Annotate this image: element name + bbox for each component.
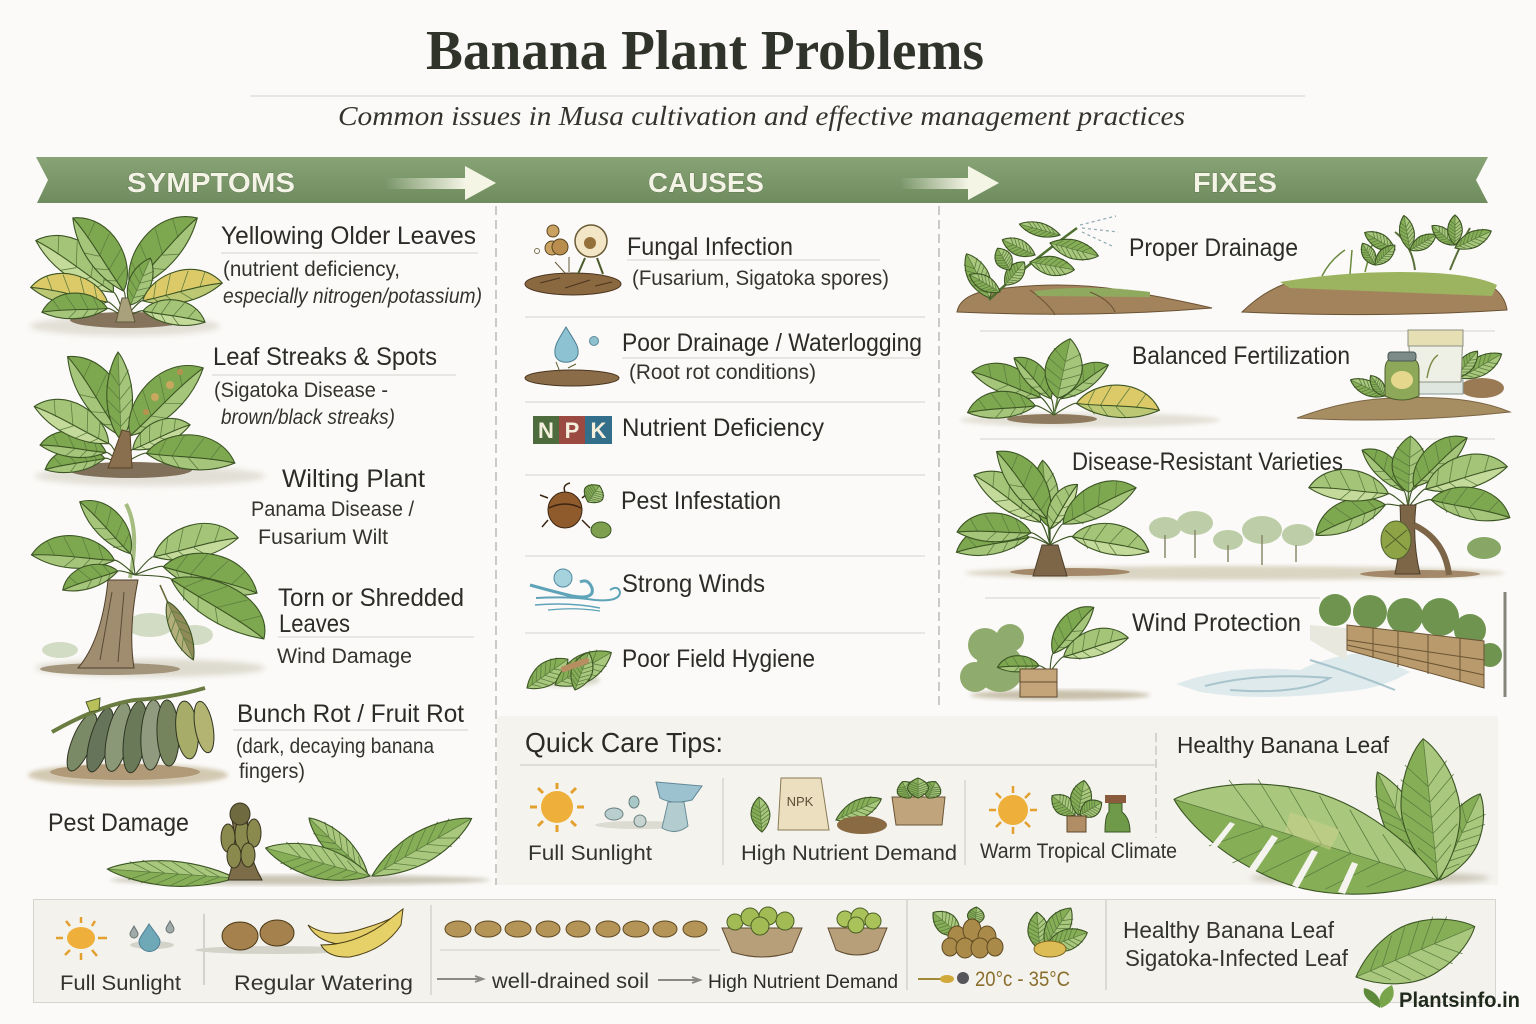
illustration: healthy banana leaves bbox=[1160, 736, 1497, 926]
brand mark bbox=[1364, 985, 1520, 1012]
brand mark: Plantsinfo.in bbox=[1399, 989, 1520, 1012]
illustration: yellowing plant bbox=[30, 212, 223, 355]
label: bunch rot / fruit rot bbox=[233, 700, 468, 783]
icon: fungal infection bbox=[525, 225, 621, 295]
label: healthy banana leaf: Healthy Banana Leaf bbox=[1123, 917, 1335, 943]
header: symptoms: SYMPTOMS bbox=[127, 167, 295, 198]
illustration: proper drainage bbox=[957, 214, 1507, 315]
icon: sun and sprayer bbox=[530, 782, 702, 832]
icon: NPK blocks: P bbox=[565, 418, 579, 443]
panel: quick care tips bbox=[497, 716, 1498, 926]
label: fungal infection bbox=[627, 233, 889, 290]
label: yellowing older leaves: Yellowing Older Leaves bbox=[221, 222, 476, 250]
arrow: to well-drained soil bbox=[437, 976, 483, 982]
label: temperature range: 20°c - 35°C bbox=[975, 968, 1070, 991]
label: nutrient deficiency: Nutrient Deficiency bbox=[622, 414, 824, 442]
illustration: disease-resistant varieties bbox=[956, 430, 1510, 591]
panel: symptoms bbox=[28, 212, 490, 891]
icon: water drop bbox=[525, 327, 619, 386]
illustration: rotten banana bunch bbox=[28, 688, 228, 786]
label: wilting plant: Panama Disease / bbox=[251, 498, 414, 521]
panel: causes bbox=[520, 225, 925, 697]
icon: NPK blocks bbox=[533, 416, 612, 444]
label: leaf streaks and spots: Leaf Streaks & Spots bbox=[213, 343, 437, 371]
label: bunch rot / fruit rot: (dark, decaying banana bbox=[236, 735, 434, 758]
icon: seed row and baskets bbox=[440, 907, 887, 957]
label: well-drained soil: well-drained soil bbox=[491, 970, 649, 993]
arrow: causes to fixes bbox=[900, 166, 999, 200]
icon: field debris bbox=[520, 641, 618, 697]
icon: NPK blocks: K bbox=[591, 418, 607, 443]
label: bunch rot / fruit rot: Bunch Rot / Fruit Rot bbox=[237, 700, 464, 728]
icon: pest bbox=[540, 480, 611, 538]
label: wilting plant bbox=[251, 465, 425, 549]
label: torn or shredded leaves: Wind Damage bbox=[277, 645, 412, 668]
subtitle: Common issues in Musa cultivation and effective management practices bbox=[338, 101, 1185, 131]
illustration: wind protection bbox=[960, 592, 1505, 700]
banner: column headers bbox=[36, 157, 1488, 203]
illustration: banana leaf bbox=[1345, 901, 1486, 1003]
illustration: wilting plant bbox=[31, 497, 266, 677]
illustration: leaf streak plant bbox=[34, 352, 265, 515]
label: torn or shredded leaves: Torn or Shredded bbox=[278, 584, 464, 612]
label: strong winds: Strong Winds bbox=[622, 570, 765, 598]
label: poor field hygiene: Poor Field Hygiene bbox=[622, 645, 815, 673]
header: causes: CAUSES bbox=[648, 167, 764, 198]
label: leaf streaks and spots bbox=[212, 343, 456, 429]
label: leaf streaks and spots: brown/black streaks) bbox=[221, 406, 395, 429]
header: fixes: FIXES bbox=[1193, 167, 1277, 198]
heading: quick care tips: Quick Care Tips: bbox=[525, 727, 723, 758]
icon: seeds and bananas bbox=[195, 909, 403, 957]
label: yellowing older leaves: especially nitrogen/potassium) bbox=[223, 285, 482, 308]
icon: sun and plant bbox=[989, 779, 1130, 834]
illustration: pest damaged plant bbox=[106, 803, 490, 891]
label: poor drainage: Poor Drainage / Waterlogging bbox=[622, 329, 922, 357]
label: yellowing older leaves: (nutrient deficiency, bbox=[223, 258, 400, 281]
label: leaf streaks and spots: (Sigatoka Disease - bbox=[214, 379, 388, 402]
panel: fixes bbox=[956, 214, 1510, 700]
icon: sun and droplets bbox=[56, 917, 174, 960]
label: full sunlight: Full Sunlight bbox=[528, 842, 652, 865]
label: fungal infection: (Fusarium, Sigatoka spores) bbox=[632, 267, 889, 290]
icon: temperature mark bbox=[918, 972, 969, 984]
panel: bottom care strip bbox=[34, 900, 1496, 1003]
label: high nutrient demand: High Nutrient Demand bbox=[708, 972, 898, 993]
icon: NPK bag and compost bbox=[750, 778, 945, 834]
label: fungal infection: Fungal Infection bbox=[627, 233, 793, 261]
label: healthy banana leaf: Healthy Banana Leaf bbox=[1177, 732, 1390, 758]
label: poor drainage: (Root rot conditions) bbox=[629, 361, 816, 384]
illustration: balanced fertilization bbox=[960, 330, 1510, 461]
label: wilting plant: Fusarium Wilt bbox=[258, 526, 388, 549]
arrow: to high nutrient demand bbox=[658, 977, 700, 983]
icon: harvest pile bbox=[926, 902, 1091, 958]
label: proper drainage: Proper Drainage bbox=[1129, 234, 1298, 262]
title: Banana Plant Problems bbox=[426, 20, 984, 82]
label: balanced fertilization: Balanced Fertilization bbox=[1132, 342, 1350, 370]
label: pest damage: Pest Damage bbox=[48, 809, 189, 837]
label: wilting plant: Wilting Plant bbox=[282, 465, 425, 493]
label: sigatoka-infected leaf: Sigatoka-Infected Leaf bbox=[1125, 945, 1349, 971]
label: yellowing older leaves bbox=[221, 222, 482, 308]
label: regular watering: Regular Watering bbox=[234, 972, 413, 995]
label: full sunlight: Full Sunlight bbox=[60, 972, 181, 995]
label: high nutrient demand: High Nutrient Demand bbox=[741, 842, 957, 865]
icon: NPK blocks: N bbox=[538, 418, 554, 443]
label: disease-resistant varieties: Disease-Resistant Varieties bbox=[1072, 448, 1343, 476]
icon: NPK bag and compost: NPK bbox=[787, 794, 814, 809]
label: pest infestation: Pest Infestation bbox=[621, 487, 781, 515]
label: poor drainage bbox=[622, 329, 922, 384]
label: torn or shredded leaves: Leaves bbox=[279, 610, 350, 638]
label: warm tropical climate: Warm Tropical Climate bbox=[980, 840, 1177, 863]
arrow: symptoms to causes bbox=[385, 166, 496, 200]
label: bunch rot / fruit rot: fingers) bbox=[239, 760, 305, 783]
icon: wind swirls bbox=[530, 569, 620, 611]
label: torn or shredded leaves bbox=[277, 584, 474, 668]
label: wind protection: Wind Protection bbox=[1132, 609, 1301, 637]
